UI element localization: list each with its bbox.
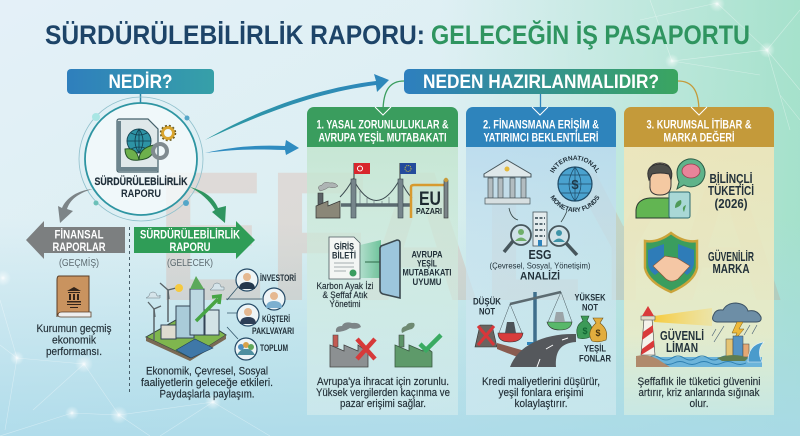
text: safe harbour xyxy=(660,328,704,355)
community: TOPLUM xyxy=(260,343,288,353)
icon: safe harbour scene xyxy=(636,303,764,367)
text: past description: performansı. xyxy=(46,346,102,358)
text: safe harbour: GÜVENLİ xyxy=(660,328,704,343)
icon: road xyxy=(497,334,576,367)
employee xyxy=(263,288,285,310)
icon: bank xyxy=(484,160,531,204)
icon: ESG building under magnifiers xyxy=(504,212,577,255)
text: green funds: YEŞİL xyxy=(584,344,606,354)
text: future description: faaliyetlerin geleceğe etkileri. xyxy=(141,377,273,389)
panel 1 header: AVRUPA YEŞİL MUTABAKATI xyxy=(318,130,446,144)
icon: factory xyxy=(316,182,340,218)
icon: money bags: $ xyxy=(582,326,588,336)
panel 3 header xyxy=(624,107,774,147)
title: GELECEĞİN İŞ PASAPORTU xyxy=(431,19,750,50)
text: green funds xyxy=(579,344,611,364)
icon: international monetary funds globe: MONETARY FUNDS xyxy=(550,195,600,212)
text: panel 2 body xyxy=(482,376,600,410)
text: panel 1 body xyxy=(316,376,450,410)
text: panel 3 body xyxy=(638,376,760,410)
text: panel 3 body: olur. xyxy=(690,398,708,410)
text: panel 2 body: yeşil fonlara erişimi xyxy=(498,387,584,399)
icon: green city xyxy=(146,276,226,361)
report circle xyxy=(79,94,203,221)
panel 1 header: 1. YASAL ZORUNLULUKLAR & xyxy=(316,118,449,132)
icon: low grade weight xyxy=(475,325,497,347)
panel 1 header xyxy=(307,107,458,147)
panel 2 header: 2. FİNANSMANA ERİŞİM & xyxy=(483,116,599,132)
heading: NEDİR xyxy=(67,69,214,94)
banner: financial reports: RAPORLAR xyxy=(52,240,106,254)
text: panel 1 body: Yüksek vergilerden kaçınma ve xyxy=(316,387,450,399)
arrow: ticket to terminal xyxy=(360,240,391,278)
text: ESG analysis xyxy=(490,247,591,282)
icon: conscious consumer xyxy=(636,159,705,218)
customer xyxy=(237,304,294,336)
text: carbon footprint: Yönetimi xyxy=(330,299,361,309)
text: compliance label: MUTABAKATI xyxy=(402,268,452,278)
icon: report book with globe and gears xyxy=(117,119,176,172)
heading: NEDİR: NEDİR? xyxy=(108,72,172,93)
text: ESG analysis: ESG xyxy=(528,247,552,262)
panel 2 xyxy=(466,106,616,415)
panel 1 xyxy=(307,107,458,415)
text: carbon footprint xyxy=(316,281,374,309)
stakeholders xyxy=(226,269,296,360)
text: past description: Kurumun geçmiş xyxy=(36,323,112,335)
icon: EU market gate: EU xyxy=(419,189,441,210)
text: trusted brand xyxy=(708,249,754,276)
arrow: to neden xyxy=(205,74,389,140)
icon: ledger book xyxy=(57,276,91,317)
text: past description xyxy=(36,323,112,358)
icon: clean factory xyxy=(395,323,441,367)
text: conscious consumer xyxy=(708,171,754,211)
text: future description: Ekonomik, Çevresel, Sosyal xyxy=(146,366,268,378)
text: trusted brand: MARKA xyxy=(712,261,750,276)
text: safe harbour: LİMAN xyxy=(666,340,698,355)
text: panel 1 body: Avrupa'ya ihracat için zorunlu. xyxy=(317,376,449,388)
icon: money bags xyxy=(577,316,607,342)
text: high grade: YÜKSEK xyxy=(574,292,606,304)
arrow: to panel 1 xyxy=(205,140,299,155)
text: future description xyxy=(141,366,273,400)
text: carbon footprint: & Şeffaf Atık xyxy=(322,290,368,300)
text: future description: Paydaşlarla paylaşım. xyxy=(160,388,254,400)
panel 2 header xyxy=(466,107,616,147)
text: conscious consumer: (2026) xyxy=(714,196,748,211)
investor: İNVESTORİ xyxy=(260,273,296,283)
icon: polluting factory xyxy=(330,322,375,367)
text: trusted brand: GÜVENİLİR xyxy=(708,249,754,264)
title: SÜRDÜRÜLEBİLİRLİK RAPORU: xyxy=(45,20,425,50)
icon: terminal phone xyxy=(380,240,400,298)
text: low grade: DÜŞÜK xyxy=(473,296,501,308)
banner: financial reports: FİNANSAL xyxy=(54,226,104,242)
banner: financial reports xyxy=(26,221,125,259)
text: conscious consumer: TÜKETİCİ xyxy=(708,183,754,198)
text: ESG analysis: (Çevresel, Sosyal, Yönetişim) xyxy=(490,260,591,270)
icon: bridge between Türkiye and EU xyxy=(340,163,416,218)
text: high grade xyxy=(574,292,606,314)
icon: EU market gate xyxy=(411,178,448,218)
icon: international monetary funds globe: $ xyxy=(571,177,579,192)
text: high grade: NOT xyxy=(582,302,598,314)
banner: sustainability report: SÜRDÜRÜLEBİLİRLİK xyxy=(140,226,240,242)
report circle: SÜRDÜRÜLEBİLİRLİK xyxy=(94,175,188,188)
text: compliance label xyxy=(402,250,452,288)
text: panel 3 body: Şeffaflık ile tüketici güvenini xyxy=(638,376,760,388)
arrow: to sustainability report xyxy=(190,187,226,223)
icon: international monetary funds globe: INTERNATIONAL xyxy=(550,156,599,173)
icon: entry ticket xyxy=(329,237,360,279)
report circle: RAPORU xyxy=(121,188,161,200)
connectors xyxy=(383,81,699,112)
text: panel 2 body: Kredi maliyetlerini düşürür, xyxy=(482,376,600,388)
text: compliance label: AVRUPA xyxy=(412,250,443,260)
title xyxy=(45,19,750,50)
text: compliance label: YEŞİL xyxy=(417,258,437,270)
panel 3 header: 3. KURUMSAL İTİBAR & xyxy=(646,116,752,132)
arrow: to financial reports xyxy=(58,189,93,223)
text: compliance label: UYUMU xyxy=(412,277,442,288)
text: panel 1 body: pazar erişimi sağlar. xyxy=(340,398,426,410)
panel 3 xyxy=(624,107,774,415)
banner: sustainability report xyxy=(134,221,255,259)
label: future: (GELECEK) xyxy=(167,257,213,269)
text: carbon footprint: Karbon Ayak İzi xyxy=(316,281,374,291)
icon: entry ticket: BİLETİ xyxy=(332,250,356,262)
heading: NEDEN HAZIRLANMALIDIR: NEDEN HAZIRLANMALIDIR? xyxy=(423,72,659,93)
panel 2 header: YATIRIMCI BEKLENTİLERİ xyxy=(484,130,598,144)
text: low grade xyxy=(473,296,501,318)
text: conscious consumer: BİLİNÇLİ xyxy=(710,171,752,186)
text: ESG analysis: ANALİZİ xyxy=(520,270,560,282)
banner: sustainability report: RAPORU xyxy=(170,240,210,254)
text: past description: ekonomik xyxy=(52,334,96,346)
text: panel 2 body: kolaylaştırır. xyxy=(514,398,568,410)
icon: entry ticket: GİRİŞ xyxy=(334,242,354,252)
icon: EU market gate: PAZARI xyxy=(416,206,442,216)
icon: balance scale xyxy=(498,292,572,345)
icon: international monetary funds globe xyxy=(550,156,600,212)
text: green funds: FONLAR xyxy=(579,354,611,364)
icon: money bags: $ xyxy=(595,328,601,338)
customer: PAKLVAYARI xyxy=(252,326,294,336)
customer: KÜŞTERİ xyxy=(262,314,290,324)
arrows: into ESG xyxy=(509,208,567,222)
text: low grade: NOT xyxy=(479,306,495,318)
panel 3 header: MARKA DEĞERİ xyxy=(664,130,734,144)
label: past: (GEÇMİŞ) xyxy=(59,256,99,269)
text: panel 3 body: artırır, kriz anlarında sığınak xyxy=(638,387,760,399)
icon: trusted brand shield xyxy=(645,233,697,292)
